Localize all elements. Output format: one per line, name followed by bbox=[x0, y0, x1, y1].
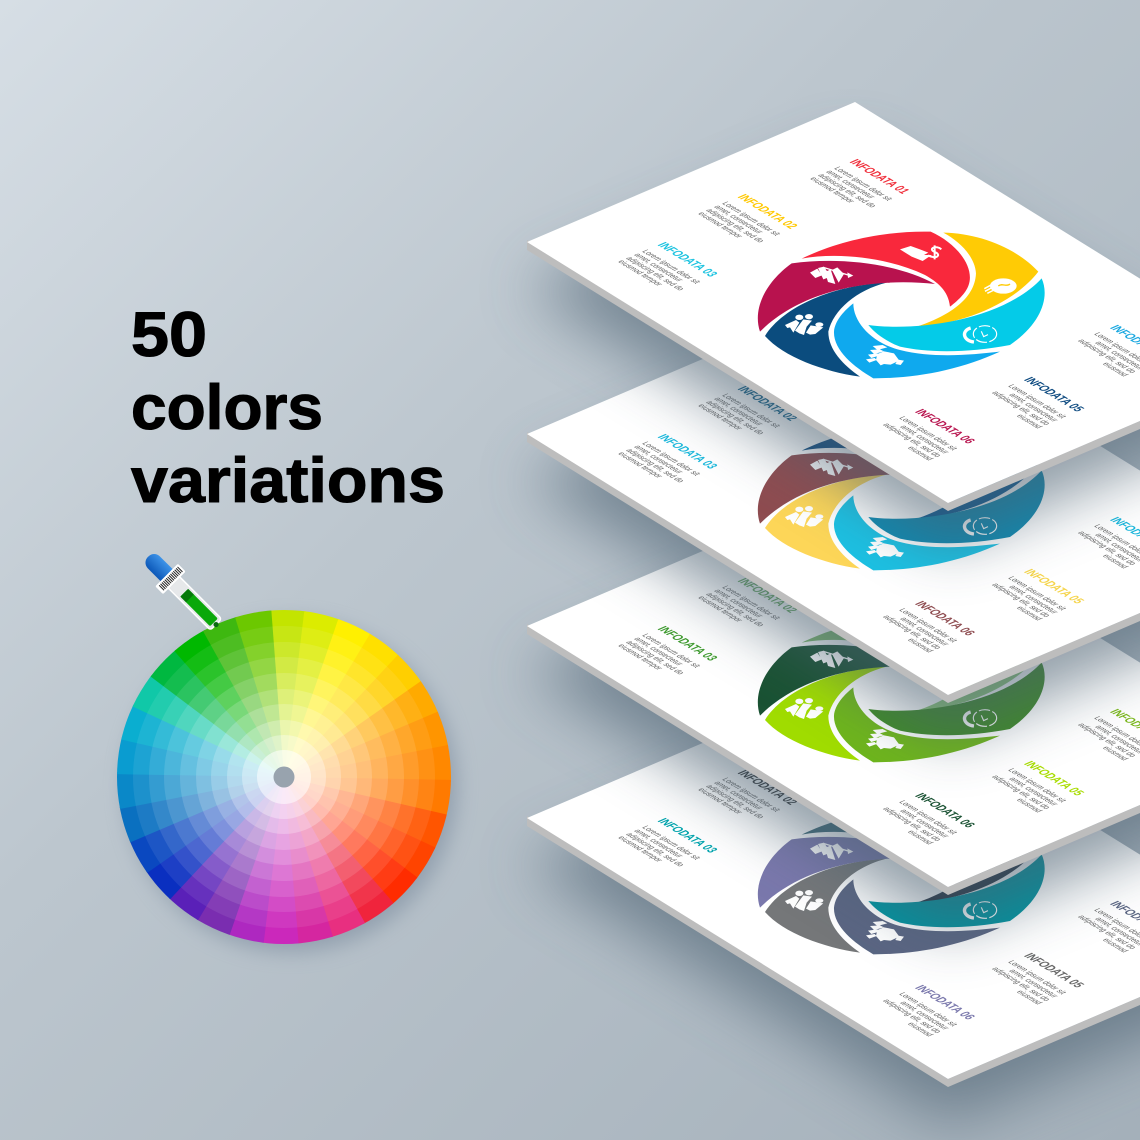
text block: infodata 05: adipiscing elit, sed do bbox=[990, 582, 1053, 618]
swirl chart: sheet 1 bbox=[758, 232, 1045, 378]
text block: infodata 02: Lorem ipsum dolor sit bbox=[720, 392, 784, 429]
text block: infodata 06: Lorem ipsum dolor sit bbox=[897, 415, 961, 452]
text block: infodata 03: INFODATA 03 bbox=[654, 241, 720, 278]
text block: infodata 02: Lorem ipsum dolor sit bbox=[720, 200, 784, 237]
text block: infodata 03: adipiscing elit, sed do bbox=[624, 831, 687, 868]
icon: light bulb bbox=[984, 278, 1017, 294]
text block: infodata 05: amet, consectetur bbox=[1007, 392, 1061, 423]
text block: infodata 05 bbox=[982, 376, 1087, 430]
text block: infodata 06: eiusmod bbox=[905, 829, 936, 846]
text block: infodata 05: INFODATA 05 bbox=[1020, 568, 1086, 605]
text block: infodata 05: INFODATA 05 bbox=[1020, 376, 1086, 413]
sheet 3 shadow bbox=[527, 531, 1140, 932]
text block: infodata 03: adipiscing elit, sed do bbox=[624, 447, 687, 484]
text block: infodata 03: Lorem ipsum dolor sit bbox=[640, 248, 704, 285]
text block: infodata 06: amet, consectetur bbox=[898, 1000, 952, 1031]
text block: infodata 06: adipiscing elit, sed do bbox=[881, 806, 944, 842]
text block: infodata 05: Lorem ipsum dolor sit bbox=[1006, 575, 1070, 612]
text block: infodata 04: adipiscing elit, sed do bbox=[1076, 914, 1139, 950]
text block: infodata 05: amet, consectetur bbox=[1007, 968, 1061, 999]
text block: infodata 06: eiusmod bbox=[905, 445, 936, 462]
title: colors bbox=[131, 373, 323, 443]
text block: infodata 06: INFODATA 06 bbox=[911, 984, 977, 1021]
text block: infodata 03: adipiscing elit, sed do bbox=[624, 255, 687, 292]
text block: infodata 02: INFODATA 02 bbox=[734, 385, 800, 422]
text block: infodata 06: INFODATA 06 bbox=[911, 600, 977, 637]
text block: infodata 03: Lorem ipsum dolor sit bbox=[640, 824, 704, 861]
title bbox=[131, 300, 445, 516]
text block: infodata 02: amet, consectetur bbox=[712, 780, 766, 811]
icon: hand with dollar bbox=[900, 245, 941, 261]
text block: infodata 06: adipiscing elit, sed do bbox=[881, 614, 944, 650]
text block: infodata 02: eiusmod tempor bbox=[696, 595, 746, 623]
text block: infodata 03 bbox=[616, 817, 721, 872]
color wheel bbox=[117, 610, 451, 944]
text block: infodata 05 bbox=[982, 568, 1087, 622]
text block: infodata 03 bbox=[616, 625, 721, 680]
panel: sheet 2 bbox=[527, 294, 1140, 703]
text block: infodata 05: Lorem ipsum dolor sit bbox=[1006, 959, 1070, 996]
text block: infodata 05: adipiscing elit, sed do bbox=[990, 966, 1053, 1002]
text block: infodata 04 bbox=[1068, 324, 1140, 378]
text block: infodata 06: INFODATA 06 bbox=[911, 408, 977, 445]
text block: infodata 06: Lorem ipsum dolor sit bbox=[897, 991, 961, 1028]
text block: infodata 02: eiusmod tempor bbox=[696, 787, 746, 815]
swirl chart: sheet 3 bbox=[758, 616, 1045, 762]
text block: infodata 06: eiusmod bbox=[905, 1021, 936, 1038]
panel: sheet 4 bbox=[527, 678, 1140, 1087]
text block: infodata 06 bbox=[873, 792, 978, 846]
color wheel shadow bbox=[125, 620, 457, 952]
text block: infodata 05: amet, consectetur bbox=[1007, 584, 1061, 615]
text block: infodata 02: adipiscing elit, sed do bbox=[704, 591, 767, 628]
text block: infodata 03: amet, consectetur bbox=[632, 444, 686, 475]
text block: infodata 03 bbox=[616, 241, 721, 296]
text block: infodata 04 bbox=[1068, 516, 1140, 570]
text block: infodata 04: adipiscing elit, sed do bbox=[1076, 338, 1139, 374]
text block: infodata 05: eiusmod bbox=[1014, 797, 1045, 814]
text block: infodata 02: adipiscing elit, sed do bbox=[704, 783, 767, 820]
icon: color dropper bbox=[137, 545, 229, 638]
text block: infodata 03: adipiscing elit, sed do bbox=[624, 639, 687, 676]
text block: infodata 02 bbox=[696, 193, 801, 248]
sheet 2 shadow bbox=[527, 339, 1140, 740]
text block: infodata 01 bbox=[808, 158, 913, 213]
panel: sheet 3 bbox=[527, 486, 1140, 895]
text block: infodata 02: eiusmod tempor bbox=[696, 403, 746, 431]
text block: infodata 02: adipiscing elit, sed do bbox=[704, 399, 767, 436]
text block: infodata 03 bbox=[616, 433, 721, 488]
text block: infodata 06: Lorem ipsum dolor sit bbox=[897, 607, 961, 644]
text block: infodata 02: adipiscing elit, sed do bbox=[704, 207, 767, 244]
swirl chart: sheet 2 bbox=[758, 424, 1045, 570]
text block: infodata 06: adipiscing elit, sed do bbox=[881, 422, 944, 458]
text block: infodata 04: eiusmod bbox=[1100, 937, 1131, 954]
text block: infodata 05: INFODATA 05 bbox=[1020, 952, 1086, 989]
text block: infodata 02: eiusmod tempor bbox=[696, 211, 746, 239]
text block: infodata 03: Lorem ipsum dolor sit bbox=[640, 632, 704, 669]
text block: infodata 06 bbox=[873, 984, 978, 1038]
text block: infodata 04: eiusmod bbox=[1100, 361, 1131, 378]
text block: infodata 01: Lorem ipsum dolor sit bbox=[832, 165, 896, 202]
text block: infodata 05: adipiscing elit, sed do bbox=[990, 390, 1053, 426]
sheet 4 shadow bbox=[527, 723, 1140, 1124]
text block: infodata 02: amet, consectetur bbox=[712, 396, 766, 427]
text block: infodata 06 bbox=[873, 600, 978, 654]
text block: infodata 02 bbox=[696, 385, 801, 440]
panel: sheet 1 bbox=[527, 102, 1140, 511]
swirl chart: sheet 4 bbox=[758, 808, 1045, 954]
text block: infodata 02: INFODATA 02 bbox=[734, 769, 800, 806]
text block: infodata 02 bbox=[696, 577, 801, 632]
text block: infodata 04 bbox=[1068, 900, 1140, 954]
text block: infodata 04 bbox=[1068, 708, 1140, 762]
text block: infodata 05 bbox=[982, 952, 1087, 1006]
text block: infodata 03: amet, consectetur bbox=[632, 828, 686, 859]
text block: infodata 03: INFODATA 03 bbox=[654, 625, 720, 662]
text block: infodata 01: amet, consectetur bbox=[824, 169, 878, 200]
text block: infodata 03: eiusmod tempor bbox=[616, 643, 666, 671]
text block: infodata 02: INFODATA 02 bbox=[734, 193, 800, 230]
text block: infodata 04: eiusmod bbox=[1100, 553, 1131, 570]
text block: infodata 06 bbox=[873, 408, 978, 462]
text block: infodata 01: INFODATA 01 bbox=[846, 158, 912, 195]
text block: infodata 05 bbox=[982, 760, 1087, 814]
text block: infodata 06: Lorem ipsum dolor sit bbox=[897, 799, 961, 836]
text block: infodata 03: eiusmod tempor bbox=[616, 835, 666, 863]
text block: infodata 02: amet, consectetur bbox=[712, 588, 766, 619]
text block: infodata 05: Lorem ipsum dolor sit bbox=[1006, 383, 1070, 420]
text block: infodata 01: eiusmod tempor bbox=[808, 176, 858, 204]
sheet 1 shadow bbox=[527, 147, 1140, 548]
text block: infodata 03: amet, consectetur bbox=[632, 636, 686, 667]
text block: infodata 05: eiusmod bbox=[1014, 989, 1045, 1006]
text block: infodata 04: adipiscing elit, sed do bbox=[1076, 722, 1139, 758]
text block: infodata 03: INFODATA 03 bbox=[654, 817, 720, 854]
title: 50 bbox=[131, 300, 207, 370]
text block: infodata 04: adipiscing elit, sed do bbox=[1076, 530, 1139, 566]
text block: infodata 03: INFODATA 03 bbox=[654, 433, 720, 470]
text block: infodata 05: eiusmod bbox=[1014, 413, 1045, 430]
text block: infodata 06: amet, consectetur bbox=[898, 808, 952, 839]
text block: infodata 03: Lorem ipsum dolor sit bbox=[640, 440, 704, 477]
text block: infodata 03: amet, consectetur bbox=[632, 252, 686, 283]
text block: infodata 06: amet, consectetur bbox=[898, 424, 952, 455]
text block: infodata 03: eiusmod tempor bbox=[616, 451, 666, 479]
text block: infodata 02 bbox=[696, 769, 801, 824]
text block: infodata 02: Lorem ipsum dolor sit bbox=[720, 584, 784, 621]
text block: infodata 04: eiusmod bbox=[1100, 745, 1131, 762]
text block: infodata 06: eiusmod bbox=[905, 637, 936, 654]
text block: infodata 06: adipiscing elit, sed do bbox=[881, 998, 944, 1034]
text block: infodata 03: eiusmod tempor bbox=[616, 259, 666, 287]
text block: infodata 02: amet, consectetur bbox=[712, 204, 766, 235]
text block: infodata 06: INFODATA 06 bbox=[911, 792, 977, 829]
text block: infodata 02: INFODATA 02 bbox=[734, 577, 800, 614]
text block: infodata 02: Lorem ipsum dolor sit bbox=[720, 776, 784, 813]
text block: infodata 05: amet, consectetur bbox=[1007, 776, 1061, 807]
text block: infodata 05: Lorem ipsum dolor sit bbox=[1006, 767, 1070, 804]
title: variations bbox=[131, 446, 445, 516]
text block: infodata 05: adipiscing elit, sed do bbox=[990, 774, 1053, 810]
text block: infodata 05: INFODATA 05 bbox=[1020, 760, 1086, 797]
text block: infodata 05: eiusmod bbox=[1014, 605, 1045, 622]
text block: infodata 01: adipiscing elit, sed do bbox=[816, 172, 879, 209]
text block: infodata 06: amet, consectetur bbox=[898, 616, 952, 647]
